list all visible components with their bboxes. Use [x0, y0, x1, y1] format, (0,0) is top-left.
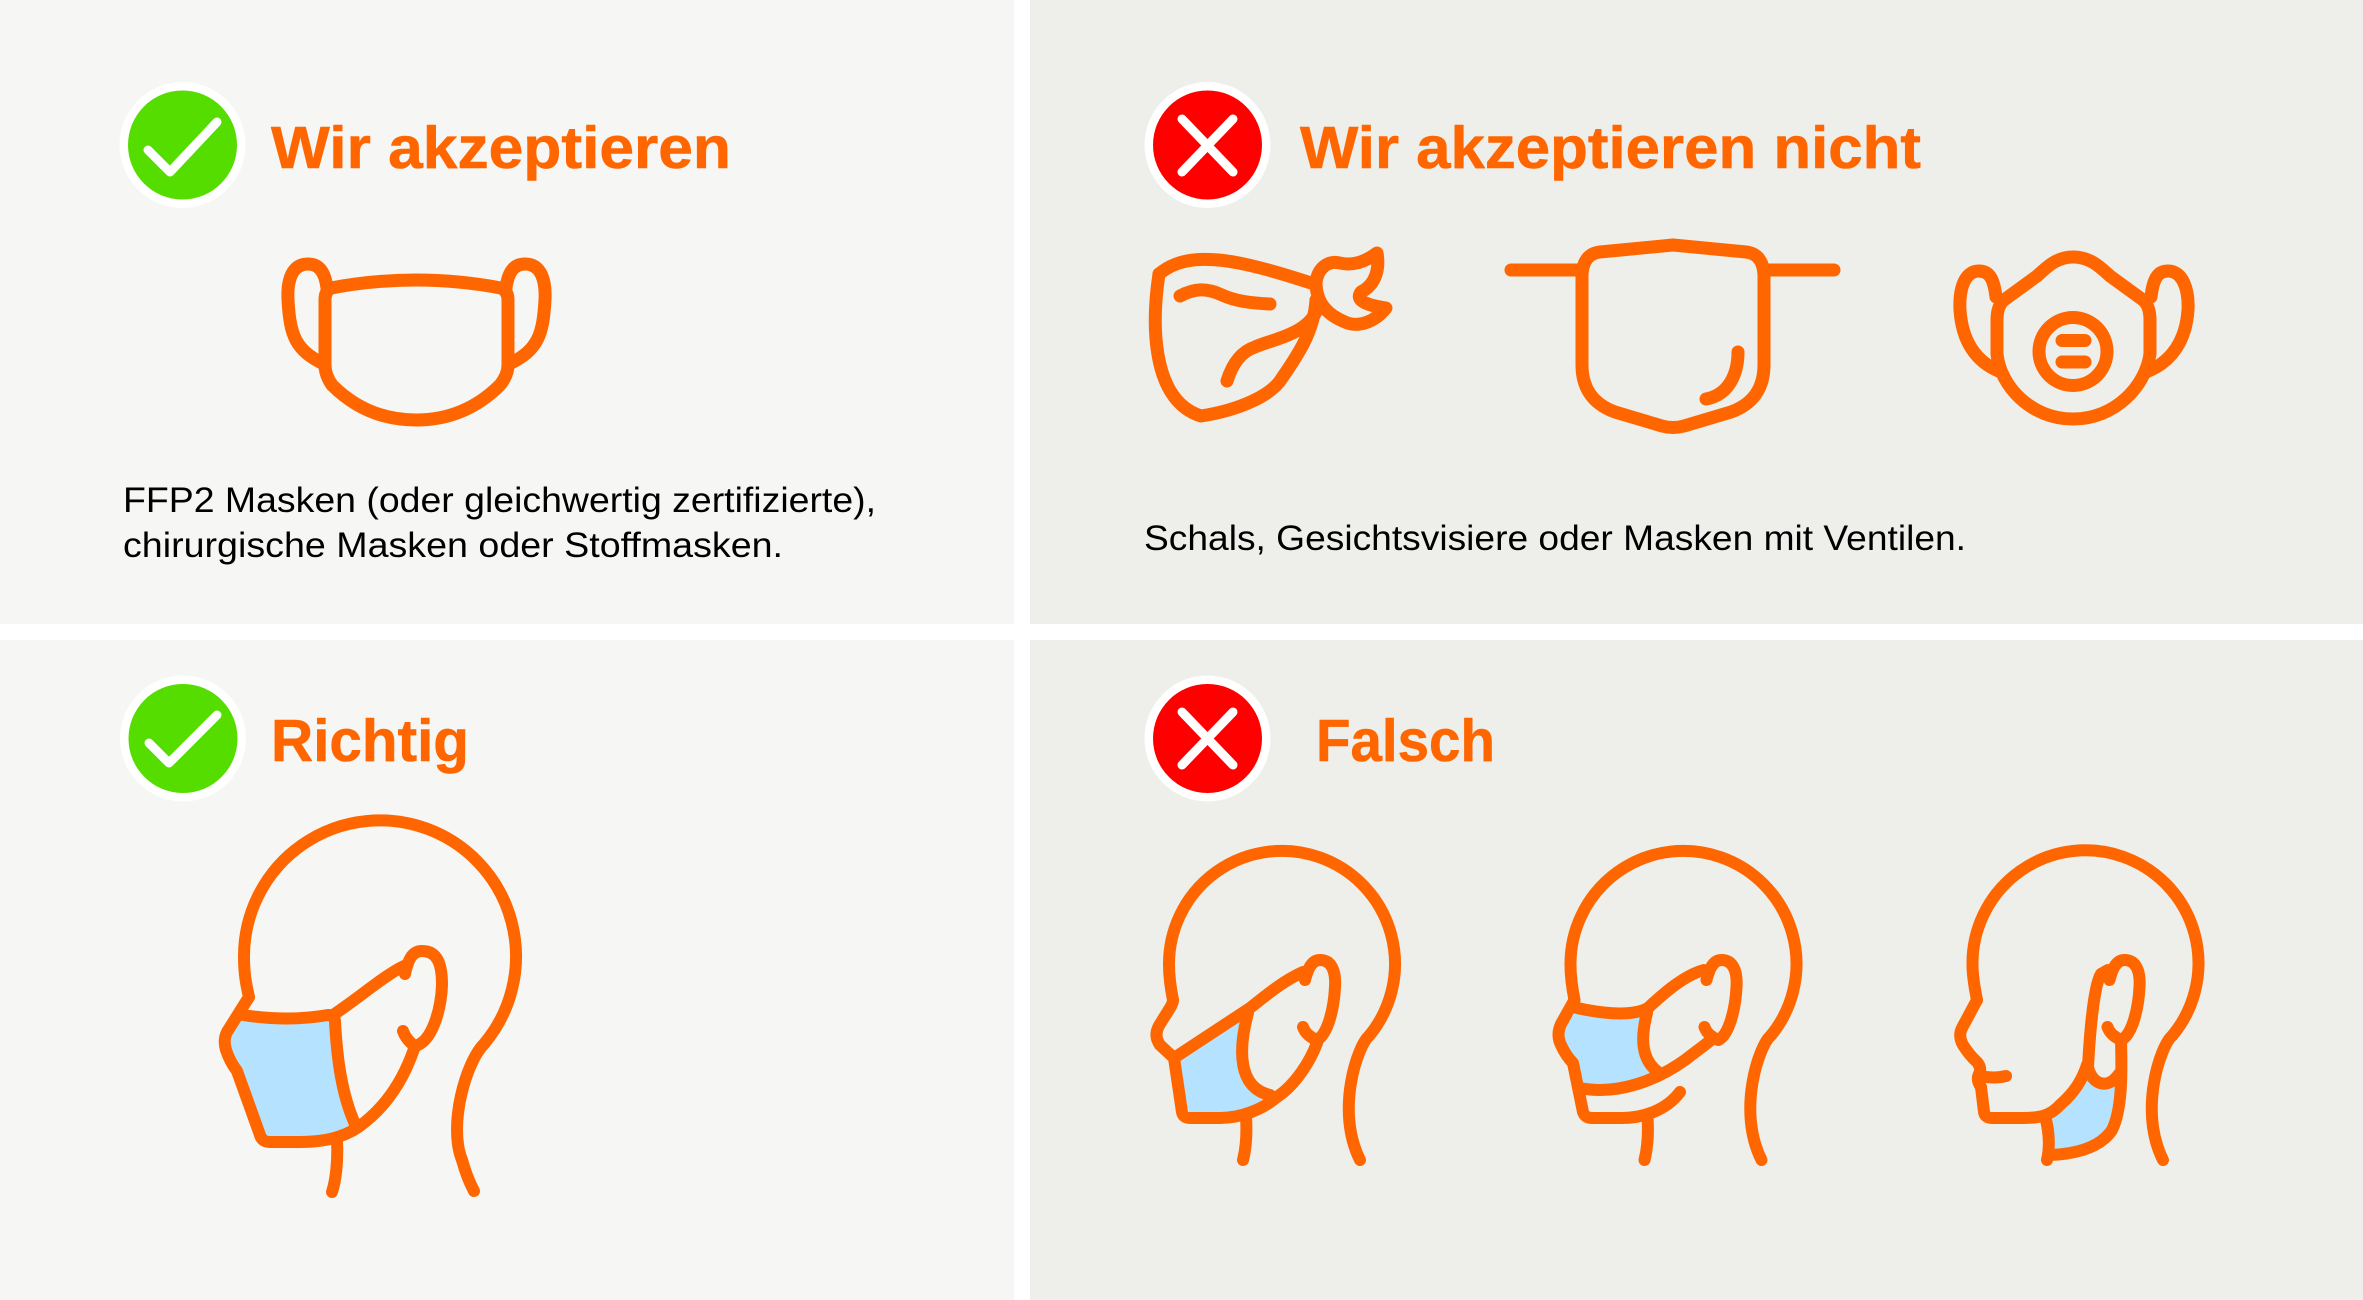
icon: red cross	[1144, 676, 1270, 802]
text: accepted masks: FFP2 Masken (oder gleichwertig zertifizierte),	[123, 481, 876, 520]
illustration: mask below nose, mouth covered wrong	[1156, 851, 1395, 1160]
illustration: mask under nose	[1558, 851, 1796, 1160]
panel: Wir akzeptieren nicht	[1030, 0, 2363, 624]
icon: green check	[120, 82, 246, 208]
heading: Richtig: Richtig	[271, 708, 469, 774]
icon: surgical mask	[288, 264, 545, 420]
heading: Wir akzeptieren: Wir akzeptieren	[271, 115, 731, 181]
heading: Falsch: Falsch	[1316, 708, 1495, 774]
illustration: mask worn correctly	[225, 820, 516, 1192]
heading: Wir akzeptieren nicht: Wir akzeptieren nicht	[1300, 115, 1921, 181]
panel: Falsch	[1030, 640, 2363, 1300]
icon: red cross	[1144, 82, 1270, 208]
text: accepted masks	[123, 481, 876, 565]
text: rejected masks: Schals, Gesichtsvisiere oder Masken mit Ventilen.	[1144, 519, 1966, 558]
icon: green check	[120, 676, 246, 802]
text: accepted masks: chirurgische Masken oder Stoffmasken.	[123, 526, 783, 565]
illustration: mask on chin	[1960, 850, 2198, 1160]
icon: scarf	[1155, 253, 1386, 416]
panel: Richtig	[0, 640, 1014, 1300]
icon: face shield	[1511, 245, 1834, 428]
panel: Wir akzeptieren	[0, 0, 1014, 624]
icon: valve respirator	[1960, 257, 2188, 419]
